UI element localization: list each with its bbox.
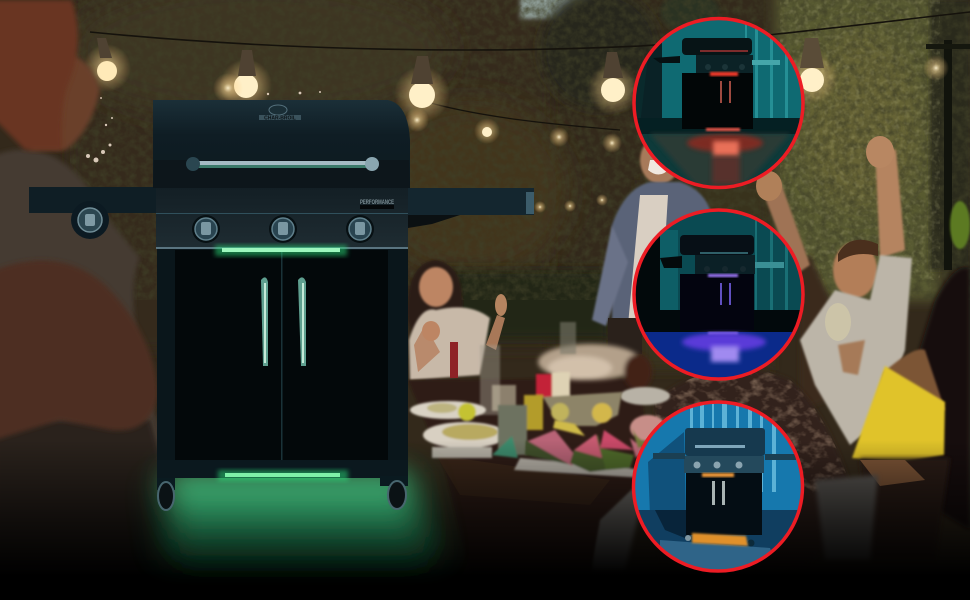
person: standing man in plaid shirt bbox=[592, 136, 712, 354]
foliage sparkles near left man bbox=[86, 91, 321, 162]
callout: purple light mode bbox=[630, 205, 810, 387]
right side shelf bbox=[408, 188, 534, 228]
amber LEDs bbox=[692, 473, 748, 546]
brand badge: CHAR-BROIL bbox=[264, 116, 296, 122]
grill silhouette bbox=[660, 235, 784, 310]
red LEDs bbox=[687, 72, 763, 184]
person: cheering man in white shirt bbox=[756, 136, 912, 445]
red ring bbox=[634, 18, 803, 188]
callout: red light mode bbox=[630, 15, 810, 195]
bowl, candle and drinks bbox=[492, 372, 622, 458]
wheels bbox=[157, 476, 408, 510]
bottom dark fade bbox=[0, 440, 970, 600]
cabinet doors bbox=[157, 249, 408, 478]
badge text: PERFORMANCE bbox=[360, 199, 394, 206]
green LED strips bbox=[215, 245, 348, 481]
grill silhouette bbox=[653, 38, 780, 129]
callout: amber light mode bbox=[630, 400, 810, 580]
watermelon slices bbox=[514, 415, 666, 478]
person: foreground curly hair bbox=[590, 365, 878, 570]
handle bbox=[186, 157, 379, 171]
dining table with food bbox=[408, 322, 670, 575]
door handles bbox=[261, 277, 306, 366]
purple ring bbox=[634, 210, 803, 379]
control panel bbox=[156, 188, 408, 249]
flower centrepiece bbox=[538, 344, 652, 390]
person: woman in yellow top bbox=[852, 267, 970, 560]
brand badge bbox=[259, 105, 301, 122]
plates bbox=[410, 387, 670, 458]
grill bbox=[653, 428, 796, 546]
purple LEDs bbox=[682, 274, 766, 362]
green light pool under grill bbox=[150, 470, 445, 575]
grill with green LED lights bbox=[29, 100, 534, 510]
person: laughing woman bbox=[408, 260, 507, 380]
amber ring bbox=[634, 402, 802, 571]
knobs bbox=[192, 215, 374, 243]
left side shelf bbox=[29, 187, 157, 239]
person: left foreground man bbox=[0, 0, 190, 570]
lid bbox=[153, 100, 410, 188]
string lights bbox=[83, 12, 970, 214]
wine glasses bbox=[480, 322, 576, 415]
